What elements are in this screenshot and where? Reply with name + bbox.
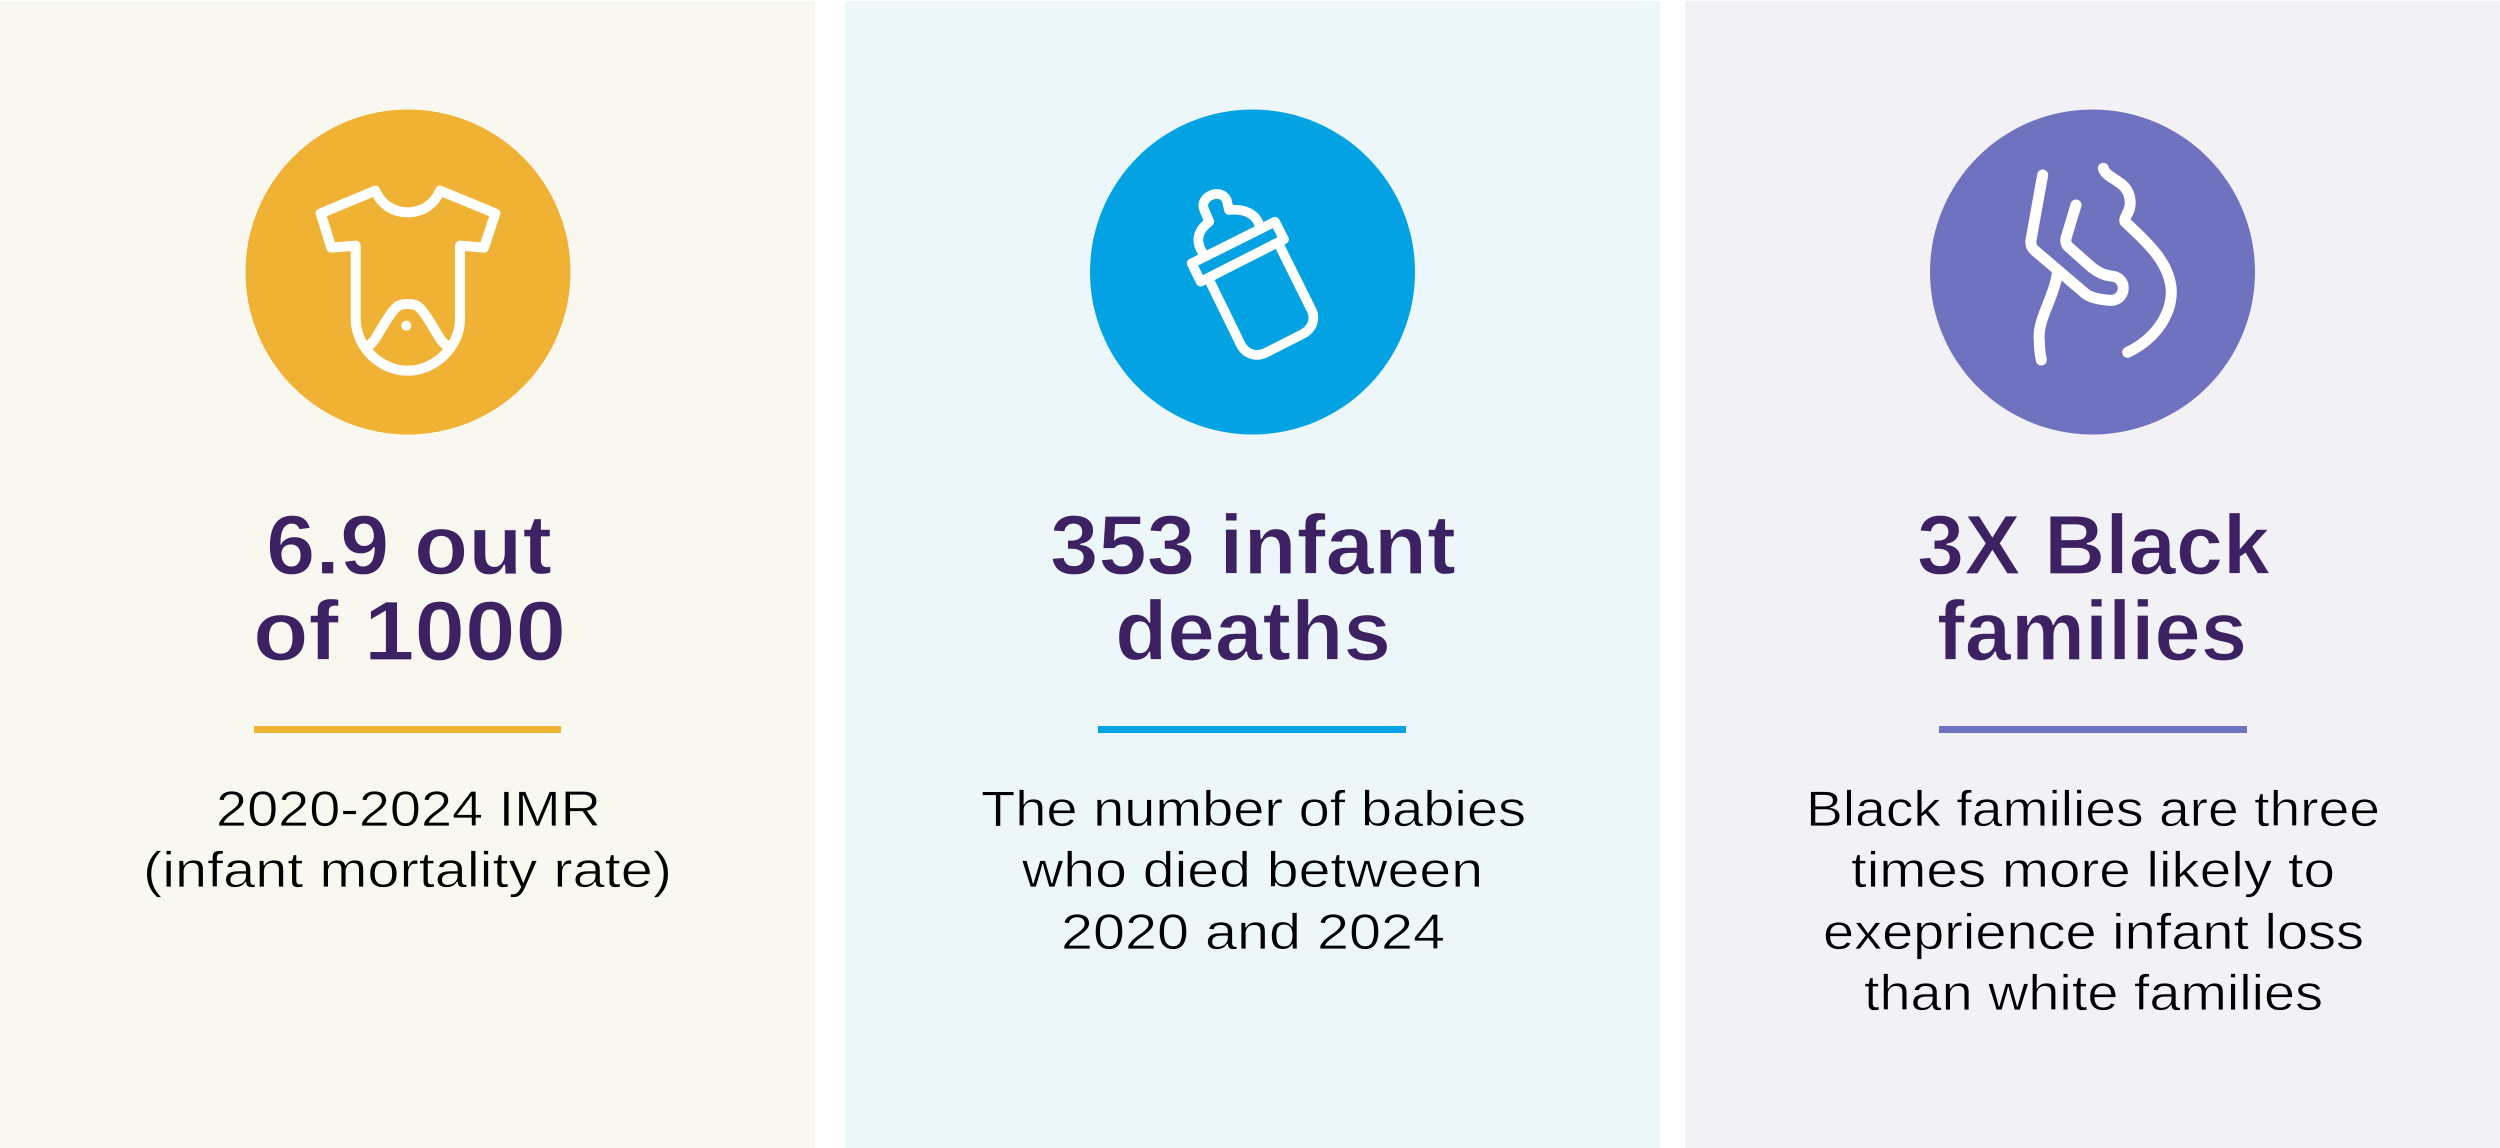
- divider: purple rule: [1939, 726, 2247, 733]
- text: deaths description: The number of babies: [981, 781, 1526, 837]
- heading: 3X Black families: 3X Black: [1917, 498, 2270, 592]
- text: deaths description: who died between: [1021, 842, 1483, 898]
- text: disparity description: [1806, 781, 2380, 1021]
- text: IMR description: (infant mortality rate): [143, 842, 672, 898]
- panel background: pale blue: [845, 1, 1660, 1148]
- text: disparity description: exeprience infant loss: [1823, 904, 2364, 960]
- heading: 6.9 out of 1000: [253, 498, 566, 678]
- panel: infant deaths: [845, 1, 1660, 1148]
- text: deaths description: 2020 and 2024: [1061, 904, 1445, 960]
- text: disparity description: than white families: [1864, 965, 2323, 1021]
- panel: infant mortality rate: [0, 1, 815, 1148]
- heading: 353 infant deaths: [1050, 498, 1456, 678]
- text: deaths description: [981, 781, 1526, 960]
- panel: Black families disparity: [1685, 1, 2500, 1148]
- heading: 353 infant deaths: deaths: [1115, 584, 1391, 678]
- heading: 353 infant deaths: 353 infant: [1050, 498, 1456, 592]
- heading: 6.9 out of 1000: 6.9 out: [266, 498, 552, 592]
- heading: 6.9 out of 1000: of 1000: [253, 584, 566, 678]
- text: disparity description: Black families are three: [1806, 781, 2380, 837]
- icon: baby onesie: [246, 110, 570, 434]
- panel background: pale lavender: [1685, 1, 2500, 1148]
- text: disparity description: times more likely to: [1851, 842, 2335, 898]
- heading: 3X Black families: families: [1937, 584, 2247, 678]
- text: IMR description: 2020-2024 IMR: [216, 781, 601, 837]
- divider: gold rule: [254, 726, 561, 733]
- panel background: cream: [0, 1, 815, 1148]
- heading: 3X Black families: [1917, 498, 2270, 678]
- text: IMR description: [143, 781, 672, 898]
- divider: blue rule: [1098, 726, 1406, 733]
- icon: baby bottle: [1090, 110, 1415, 434]
- icon: pregnant silhouette: [1930, 110, 2255, 434]
